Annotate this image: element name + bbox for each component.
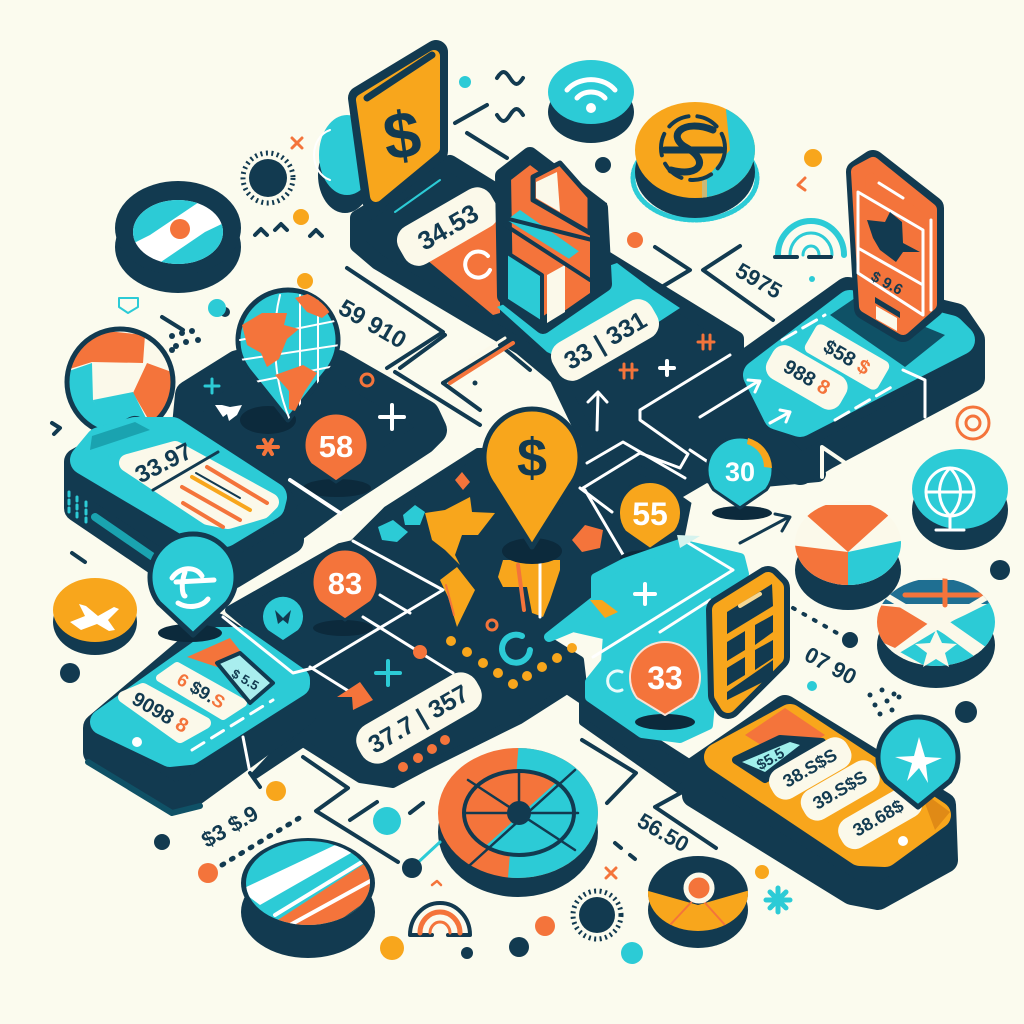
dotted route [446, 636, 577, 689]
pin: 55 [618, 481, 682, 566]
icon: small plane [215, 405, 242, 421]
icon: pie disc right [795, 505, 901, 610]
label: 5975: 5975 [731, 258, 786, 304]
pin: 55: 55 [632, 496, 668, 532]
dotted leader right [793, 608, 837, 633]
icon: top phone with dollar [360, 52, 440, 212]
panel: top orange card [427, 217, 500, 315]
label: 07 90: 07 90 [801, 642, 861, 690]
pin: central dollar [484, 409, 580, 564]
icon: marks on top platform [620, 335, 714, 378]
icon: beach ball [64, 326, 176, 430]
icon: globe pin [238, 290, 340, 434]
decorative tag [119, 298, 138, 313]
icon: envelope disc [645, 856, 750, 948]
icon: top phone with dollar: $ [379, 96, 425, 174]
icon: right phone [858, 162, 932, 331]
panel: lower-left teal platform: $ 5.5 [229, 666, 262, 693]
icon: striped disc [240, 838, 380, 958]
panel: left teal platform: 33.97 [131, 438, 197, 489]
decorative teal dots [208, 76, 817, 964]
icon: rainbow [410, 903, 470, 935]
icon: teal arc [775, 221, 844, 257]
pale teal highlight [677, 535, 700, 548]
icon: open book [503, 155, 610, 326]
label: $3 $.9: $3 $.9 [197, 800, 262, 853]
dotted leader [222, 817, 301, 865]
white connector: left platform to map [290, 480, 340, 513]
icon: marks on left platform [205, 374, 404, 454]
platform: central dark network [175, 163, 818, 790]
label: 34.53 [391, 181, 504, 272]
icon: red arrow [337, 682, 373, 710]
panel: yellow platform: 39.S$S [809, 767, 871, 813]
icon: sun top [243, 153, 293, 203]
label: 56 50: 56.50 [633, 808, 693, 857]
label: 33 | 331: 33 | 331 [559, 306, 652, 376]
icon: flag disc top left [115, 181, 241, 293]
icon: calculator phone [720, 580, 776, 705]
icon: teal plus [376, 661, 400, 685]
icon: ring and swirl [487, 620, 530, 663]
pin: 30 [707, 437, 773, 520]
pin: 83: 83 [328, 566, 362, 601]
pin: teal swirl [150, 534, 236, 642]
panel: right teal platform: $58 $ [819, 336, 874, 380]
icon: small teal pinwheel pin [263, 597, 303, 640]
label: 34.53: 34.53 [412, 198, 484, 256]
pin: 33: 33 [647, 660, 683, 696]
icon: arrow to pie [740, 514, 790, 543]
panel: teal mid platform [549, 538, 744, 738]
block: 59 910 outline: 59 910 [334, 294, 411, 354]
panel: lower-left teal platform: 9098 8 [128, 688, 192, 738]
block: 59 910 outline [310, 267, 443, 368]
icon: wifi disc [548, 60, 634, 143]
panel: top teal strip [497, 263, 680, 370]
panel: lower-left teal platform: 6 $9.S [173, 669, 229, 713]
icon: orange dots [398, 735, 450, 772]
icon: compass pie [438, 748, 598, 897]
decorative orange dots [198, 232, 643, 936]
lines lower centre [303, 740, 716, 862]
icon: target [957, 407, 989, 439]
label: 5975 [655, 246, 786, 320]
cream gap band [683, 483, 720, 506]
icon: teal map splats [378, 505, 425, 542]
lines around orange stripe [395, 335, 530, 425]
panel: left teal platform [69, 422, 290, 575]
label: 37.7 | 357 [350, 666, 488, 770]
icon: white C [465, 252, 490, 278]
icon: teal globe disc [912, 449, 1008, 550]
panel: yellow platform [695, 708, 950, 897]
label: 33 | 331 [545, 293, 665, 387]
decorative yellow dots [266, 149, 822, 960]
panel: yellow platform: 38.S$S [779, 745, 841, 791]
icon: orange map splats [455, 472, 603, 552]
connector lines white [580, 355, 790, 558]
pin: 33 [630, 642, 700, 730]
pin: 83 [312, 549, 378, 636]
icon: up arrow [588, 392, 607, 430]
icon: flag disc right [877, 578, 1000, 688]
node: orange [413, 645, 427, 659]
decorative marks [52, 72, 805, 885]
connector lines central [310, 541, 453, 692]
pin: 58 [303, 413, 371, 497]
icon: triangle outline [822, 447, 860, 477]
icon: plane disc [53, 578, 137, 655]
panel: lower-left teal platform [88, 617, 313, 813]
icon: sun bottom [573, 891, 621, 939]
panel: right teal platform: 988 8 [779, 356, 834, 400]
panel: yellow platform: $5.5 [754, 745, 788, 774]
label: 37.7 | 357: 37.7 | 357 [363, 679, 474, 759]
decorative dots [60, 157, 1010, 959]
panel: yellow platform: 38.68$ [849, 796, 907, 840]
pin: central dollar: $ [517, 428, 547, 488]
pin: 58: 58 [319, 429, 353, 464]
pin: teal star [878, 717, 958, 807]
icon: teal disc behind phone [314, 115, 375, 213]
pin: 30: 30 [725, 457, 755, 487]
icon: right phone: $ 9.6 [868, 268, 905, 299]
icon: snowflake [766, 888, 790, 912]
icon: coin [633, 100, 760, 220]
icon: central map [425, 497, 560, 627]
icon: orange stripe [450, 338, 513, 386]
panel: right teal platform [750, 292, 970, 470]
dark node with teal leader [402, 842, 440, 878]
